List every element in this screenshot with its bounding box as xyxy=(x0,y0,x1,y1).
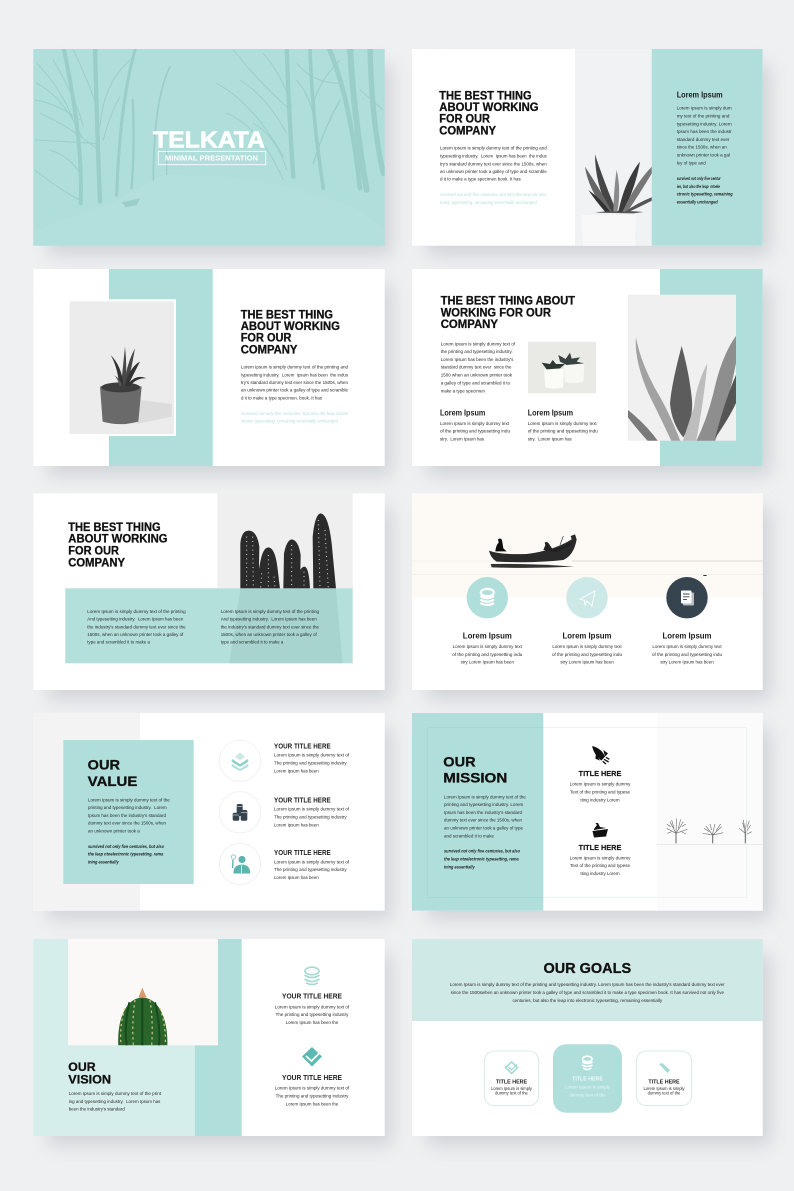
icon: coin stack outline xyxy=(304,967,320,984)
icon: document circle xyxy=(666,577,708,618)
item two text: TITLE HERE xyxy=(579,845,622,852)
body text: Lorem Ipsum is simply dummy text of the print xyxy=(69,1091,162,1097)
heading xyxy=(241,307,340,357)
item title one: Lorem Ipsum has been xyxy=(274,768,319,774)
item one text: Lorem Ipsum is simply dummy xyxy=(570,781,631,787)
photo: succulent in grey pot xyxy=(70,301,174,434)
body text: an unknown printer took a xyxy=(88,828,140,834)
column one: Lorem Ipsum xyxy=(463,631,512,640)
card: center highlighted: dummy text of the xyxy=(569,1092,606,1098)
body text: try's standard dummy text ever since the 1500s, when xyxy=(241,380,348,386)
card: left: Lorem Ipsum is simply xyxy=(491,1086,533,1091)
item one text: tting industry Lorem xyxy=(580,797,620,803)
body text: d it to make a type specimen book. It has xyxy=(440,177,521,183)
panel: slide best thing with plant xyxy=(412,49,763,247)
column: lorem ipsum left: Lorem Ipsum xyxy=(440,409,485,418)
column three xyxy=(652,631,722,666)
item one text: The printing and typesetting industry xyxy=(276,1012,349,1018)
body text: an unknown printer took a galley of type and scramble xyxy=(440,169,547,175)
panel: slide with potted plant xyxy=(33,269,385,466)
item one text: Text of the printing and typese xyxy=(570,789,630,795)
intro text: Lorem Ipsum is simply dummy text of the printing and typesetting industry. Lorem Ipsum has been the industry's standard dummy text ever xyxy=(450,982,725,988)
heading: MISSION xyxy=(443,770,507,786)
photo: aloe leaves xyxy=(628,295,737,442)
body text: Ipsum has been the industry's standard xyxy=(88,813,166,819)
heading: OUR xyxy=(88,756,120,772)
teal column text: essentially unchanged xyxy=(677,199,719,205)
body text: dummy text ever since the 1500s, when xyxy=(88,821,166,827)
body text: survived not only five centuries, but also xyxy=(444,849,520,855)
column: lorem ipsum left: of the printing and typesetting indu xyxy=(440,429,510,435)
body text: typesetting industry. Lorem Ipsum has been the indus xyxy=(241,372,349,378)
cacti reflection through band xyxy=(229,588,343,663)
teal column text: survived not only five centur xyxy=(677,176,721,182)
body text right xyxy=(221,609,319,646)
column three: Lorem Ipsum xyxy=(662,631,712,640)
teal column text: Lorem Ipsum is simply dum xyxy=(677,105,732,111)
column one: Lorem Ipsum is simply dummy text xyxy=(453,644,523,650)
column one xyxy=(452,631,523,666)
panel: our mission xyxy=(412,713,763,911)
item title one xyxy=(274,744,350,774)
column one: stry Lorem Ipsum has been xyxy=(461,660,514,666)
item two text: Lorem Ipsum is simply dummy text of xyxy=(275,1086,350,1092)
panel: slide with aloe photo xyxy=(412,269,763,466)
item one text: YOUR TITLE HERE xyxy=(282,994,342,1001)
heading: WORKING FOR OUR xyxy=(441,305,551,319)
card: right: Lorem Ipsum is simply xyxy=(644,1086,685,1091)
teal column text: Ipsum has been the industr xyxy=(677,129,732,135)
body text right: the industry's standard dummy text ever since the xyxy=(221,624,319,630)
column: lorem ipsum right: Lorem Ipsum xyxy=(528,409,573,418)
panel: slide with boat photo xyxy=(412,493,763,690)
teal column text xyxy=(677,90,733,205)
body text xyxy=(241,365,349,401)
card: left xyxy=(484,1051,539,1106)
item title two xyxy=(274,797,350,828)
item title one: The printing and typesetting industry xyxy=(274,761,347,767)
heading: THE BEST THING xyxy=(241,307,333,321)
body text: Lorem Ipsum has been the industry's xyxy=(441,357,514,363)
heading: ABOUT WORKING xyxy=(68,532,168,546)
column: lorem ipsum left: Lorem Ipsum is simply dummy text xyxy=(440,421,510,427)
heading: COMPANY xyxy=(441,317,498,331)
heading xyxy=(88,756,137,789)
item one text xyxy=(275,994,350,1026)
body text left xyxy=(87,609,186,646)
body text: and scrambled it to make xyxy=(444,833,494,839)
photo: barrel cactus xyxy=(68,939,218,1047)
body text: the printing and typesetting industry. xyxy=(441,349,513,355)
teal column text: ies, but also the leap ntoele xyxy=(677,184,720,190)
body text: Lorem Ipsum is simply dummy text of the printing and xyxy=(241,365,348,371)
item title one: Lorem Ipsum is simply dummy text of xyxy=(274,753,350,759)
column two xyxy=(552,631,622,666)
photo: trees in snow xyxy=(657,713,763,911)
body text: try's standard dummy text ever since the 1500s, when xyxy=(440,161,547,167)
body text right: 1500s, when an unknown printer took a galley of xyxy=(221,632,317,638)
column three: Lorem Ipsum is simply dummy text xyxy=(652,644,722,650)
teal column text: unknown printer took a gal xyxy=(677,153,730,159)
heading: FOR OUR xyxy=(439,112,490,126)
photo: aloe in white pot xyxy=(585,154,652,214)
column: lorem ipsum right: of the printing and typesetting indu xyxy=(528,429,598,435)
cover title: TELKATA xyxy=(153,126,265,152)
item one text xyxy=(570,771,631,803)
intro text xyxy=(450,982,725,1004)
item title one: YOUR TITLE HERE xyxy=(274,744,331,751)
teal italic note: ctronic typesetting, remaining essentially unchanged xyxy=(241,419,338,425)
body text: ing and typesetting industry. Lorem Ipsum has xyxy=(69,1099,161,1105)
heading: OUR xyxy=(443,754,476,770)
heading: FOR OUR xyxy=(68,544,119,558)
item two text: Text of the printing and typese xyxy=(570,863,630,869)
card: right: TITLE HERE xyxy=(648,1079,680,1085)
body text left: type and scrambled it to make a xyxy=(87,640,150,646)
photo: boat on water xyxy=(412,493,763,598)
body text xyxy=(444,794,526,870)
column two: stry Lorem Ipsum has been xyxy=(560,660,614,666)
cover title xyxy=(153,126,266,165)
icon: rocket xyxy=(592,746,609,764)
body text right: type and scrambled it to make a xyxy=(221,640,284,646)
teal column text: ctronic typesetting, remaining xyxy=(677,192,733,198)
heading xyxy=(439,88,539,138)
item two text: The printing and typesetting industry xyxy=(276,1093,349,1099)
item title three xyxy=(274,850,350,881)
body text: 1500 when an unknown printer took xyxy=(441,373,513,379)
body text right: And typesetting industry. Lorem Ipsum has been xyxy=(221,617,317,623)
column two: of the printing and typesetting indu xyxy=(552,652,622,658)
item two text xyxy=(275,1075,350,1107)
intro text: since the 1500swhen an unknown printer took a galley of type and scrambled it to make a type specimen book. It has survived not only five xyxy=(451,990,724,996)
icon: paper plane circle xyxy=(566,577,608,618)
body text: the leap ntoelectronic typesetting, rema xyxy=(88,852,164,858)
body text: ining essentially xyxy=(444,864,475,870)
card: center highlighted xyxy=(553,1044,622,1113)
heading: THE BEST THING xyxy=(439,88,532,102)
heading: VISION xyxy=(68,1073,111,1087)
item title three: YOUR TITLE HERE xyxy=(274,850,331,857)
column: lorem ipsum right: Lorem Ipsum is simply dummy text xyxy=(528,421,597,427)
cover title: MINIMAL PRESENTATION xyxy=(165,156,258,163)
body text: Lorem Ipsum is simply dummy text of the xyxy=(88,797,170,803)
column three: stry Lorem Ipsum has been xyxy=(660,660,714,666)
heading xyxy=(443,754,507,786)
photo: cacti xyxy=(217,493,353,589)
card: center highlighted: TITLE HERE xyxy=(572,1077,603,1083)
body text: Ipsum has been the industry's standard xyxy=(444,810,522,816)
panel: our goals xyxy=(412,939,763,1136)
body text: dummy text ever since the 1500s, when xyxy=(444,818,522,824)
heading: OUR GOALS xyxy=(543,960,631,977)
body text: printing and typesetting industry. Lorem xyxy=(88,805,167,811)
teal italic note: tronic typesetting, remaining essentially unchanged xyxy=(440,200,537,206)
teal column text: Lorem Ipsum xyxy=(677,90,723,99)
item two text: Lorem Ipsum has been the xyxy=(286,1101,339,1107)
column: lorem ipsum right xyxy=(528,409,598,442)
card: center highlighted: Lorem Ipsum is simply xyxy=(565,1084,611,1090)
item title two: YOUR TITLE HERE xyxy=(274,797,331,804)
item title two: The printing and typesetting industry xyxy=(274,815,347,821)
heading: OUR xyxy=(68,1060,96,1074)
teal italic note xyxy=(440,192,547,206)
body text: Lorem Ipsum is simply dummy text of the printing and xyxy=(440,146,547,152)
body text left: the industry's standard dummy text ever since the xyxy=(87,624,186,630)
body text xyxy=(69,1091,162,1113)
column: lorem ipsum left: stry. Lorem Ipsum has xyxy=(440,436,485,442)
icon: layered pyramid xyxy=(219,740,261,781)
body text: Lorem Ipsum is simply dummy text of xyxy=(441,341,516,347)
item title three: Lorem Ipsum is simply dummy text of xyxy=(274,859,350,865)
heading: ABOUT WORKING xyxy=(439,100,539,114)
body text: the leap ntoelectronic typesetting, rema xyxy=(444,857,519,863)
panel: cover slide xyxy=(33,47,385,246)
teal italic note xyxy=(241,411,348,425)
item title two: Lorem Ipsum is simply dummy text of xyxy=(274,807,350,813)
body text left: Lorem Ipsum is simply dummy text of the printing xyxy=(87,609,186,615)
heading: COMPANY xyxy=(241,343,297,357)
icon: coin stacks xyxy=(219,792,261,833)
heading xyxy=(68,520,168,570)
teal column text: typesetting industry. Lorem xyxy=(677,121,732,127)
icon: person with idea xyxy=(219,843,261,885)
body text: survived not only five centuries, but also xyxy=(88,844,164,850)
body text left: 1500s, when an unknown printer took a galley of xyxy=(87,632,184,638)
photo: two white pots xyxy=(528,342,596,393)
icon: ship xyxy=(592,823,608,838)
item two text: tting industry Lorem xyxy=(580,871,620,877)
body text xyxy=(440,146,547,183)
body text: printing and typesetting industry. Lorem xyxy=(444,802,523,808)
photo: misty winter trees xyxy=(34,49,385,208)
heading: THE BEST THING ABOUT xyxy=(441,294,576,308)
teal column text: ley of type and xyxy=(677,160,706,166)
body text: Lorem Ipsum is simply dummy text of the xyxy=(444,794,526,800)
body text: make a type specimen xyxy=(441,388,485,394)
card: left: TITLE HERE xyxy=(496,1079,527,1085)
body text left: And typesetting industry. Lorem Ipsum has been xyxy=(87,617,184,623)
body text: typesetting industry. Lorem Ipsum has been the indus xyxy=(440,153,547,159)
column two: Lorem Ipsum xyxy=(562,631,612,640)
body text: a galley of type and scrambled it to xyxy=(441,380,510,386)
heading: ABOUT WORKING xyxy=(241,319,340,333)
heading: VALUE xyxy=(88,773,137,789)
body text: d it to make a type specimen. book. It has xyxy=(241,395,323,401)
item one text: Lorem Ipsum has been the xyxy=(286,1020,339,1026)
body text: standard dummy text ever since the xyxy=(441,365,512,371)
intro text: centuries, but also the leap into electronic typesetting, remaining essentially xyxy=(512,998,663,1004)
heading: COMPANY xyxy=(68,556,125,570)
heading xyxy=(68,1060,111,1087)
card: left: dummy text of the xyxy=(495,1090,529,1095)
heading xyxy=(441,294,576,331)
body text xyxy=(88,797,170,866)
body text: been the industry's standard xyxy=(69,1107,125,1113)
card: right: dummy text of the xyxy=(648,1090,681,1095)
heading: THE BEST THING xyxy=(68,520,161,534)
column: lorem ipsum right: stry. Lorem Ipsum has xyxy=(528,436,572,442)
teal italic note: survived not only five centuries, but also the leap ele also xyxy=(440,192,547,198)
teal column text: standard dummy text ever xyxy=(677,137,730,143)
teal column text: since the 1500s, when an xyxy=(677,145,727,151)
icon: coins circle xyxy=(467,577,508,618)
teal column text: my text of the printing and xyxy=(677,113,730,119)
column three: of the printing and typesetting indu xyxy=(652,652,722,658)
item title three: The printing and typesetting industry xyxy=(274,867,347,873)
column: lorem ipsum left xyxy=(440,409,510,442)
snow ground xyxy=(152,175,168,182)
item one text: TITLE HERE xyxy=(579,771,622,778)
teal italic note: survived not only five centuries, but also the leap ntoele xyxy=(241,411,348,417)
body text: an unknown printer took a galley of type xyxy=(444,826,523,832)
animal silhouette xyxy=(122,198,140,207)
thin frame xyxy=(427,727,747,897)
heading: COMPANY xyxy=(439,124,496,138)
item two text xyxy=(570,845,631,877)
panel: slide with cactus photo xyxy=(33,493,385,690)
body text: an unknown printer took a galley of type and scramble xyxy=(241,388,348,394)
card: right xyxy=(636,1051,692,1106)
item title two: Lorem Ipsum has been xyxy=(274,822,319,828)
panel: our vision xyxy=(33,939,385,1136)
item two text: YOUR TITLE HERE xyxy=(282,1075,342,1082)
item title three: Lorem Ipsum has been xyxy=(274,875,319,881)
panel: our value xyxy=(33,713,385,911)
item one text: Lorem Ipsum is simply dummy text of xyxy=(275,1004,350,1010)
teal band xyxy=(65,588,353,663)
body text: ining essentially xyxy=(88,860,119,866)
heading: FOR OUR xyxy=(241,331,292,345)
column one: of the printing and typesetting indu xyxy=(452,652,523,658)
body text right: Lorem Ipsum is simply dummy text of the printing xyxy=(221,609,319,615)
icon: layered check xyxy=(302,1047,322,1066)
column two: Lorem Ipsum is simply dummy text xyxy=(552,644,622,650)
body text xyxy=(441,341,516,394)
item two text: Lorem Ipsum is simply dummy xyxy=(570,855,631,861)
